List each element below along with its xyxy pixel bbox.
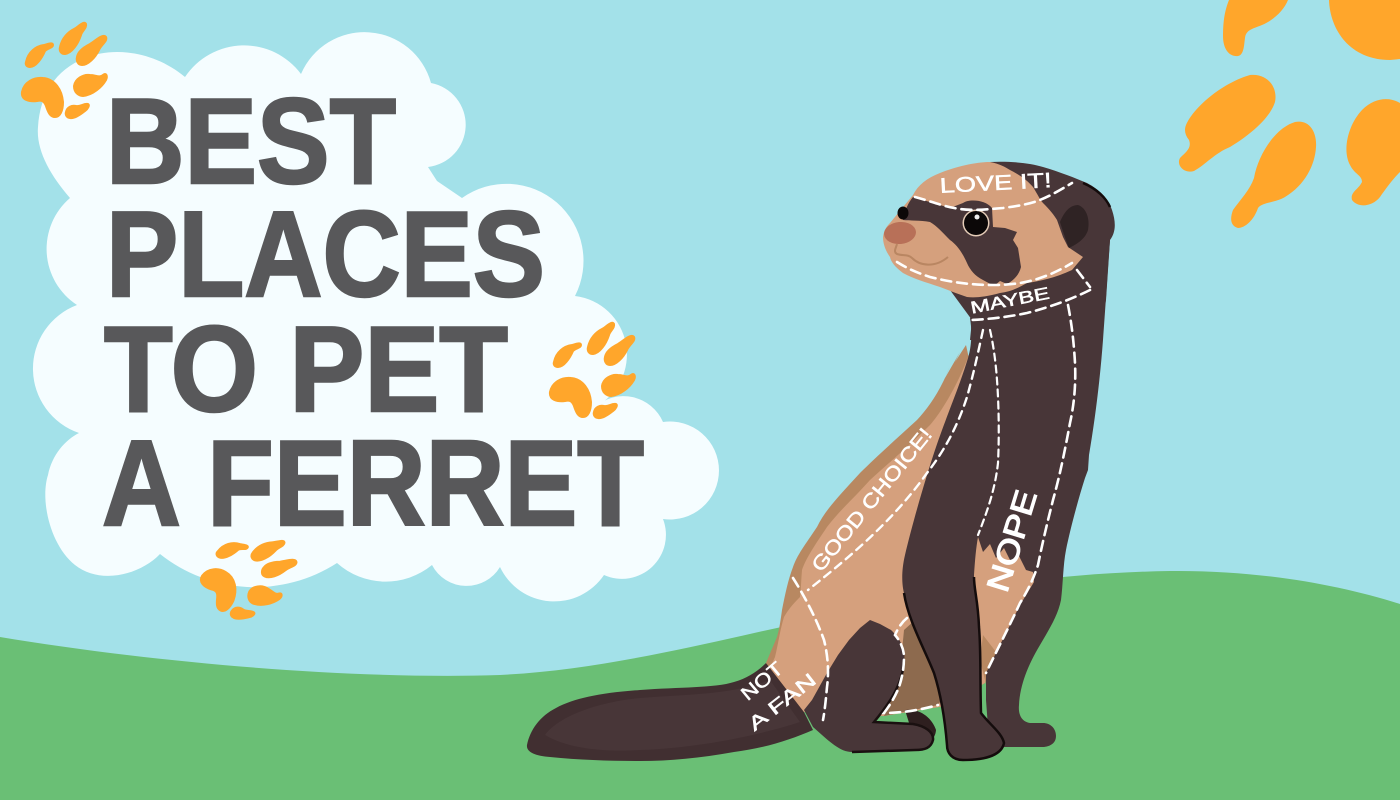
ear: [1060, 205, 1089, 248]
nose: [883, 221, 917, 245]
label: not a fan: A FAN: [745, 670, 821, 736]
eye: [962, 210, 990, 236]
tan patch between the legs: [974, 530, 1036, 684]
neck, torso, front leg and right hind leg: [902, 230, 1110, 760]
title: [102, 73, 644, 551]
ferret flank, light tan: [770, 352, 1000, 716]
near haunch and hind foot: [804, 620, 933, 752]
face, tan: [883, 162, 1083, 297]
large paw print, top right: [1179, 0, 1400, 228]
ferret tail: [527, 663, 813, 761]
dashed petting zone outlines: [793, 183, 1090, 720]
paw print, cloud right: [550, 323, 635, 418]
eye mask: [903, 197, 1021, 286]
ferret illustration: [527, 162, 1115, 761]
front leg outline: [904, 577, 1004, 760]
mouth: [895, 244, 948, 265]
far hind foot: [905, 710, 936, 743]
label: nope: NOPE: [980, 486, 1044, 596]
paw print, cloud top left: [22, 23, 107, 118]
green hill: [0, 571, 1400, 800]
shadow in the tan patch: [980, 635, 996, 684]
belly shadow: [884, 620, 945, 716]
label: good choice: GOOD CHOICE!: [808, 424, 937, 576]
cloud panel behind title: [33, 32, 719, 601]
title: TO PET: [104, 301, 508, 437]
label: not a fan: [737, 658, 821, 736]
title: A FERRET: [102, 415, 644, 551]
paw print, cloud bottom: [192, 516, 303, 632]
title: BEST: [106, 73, 396, 209]
title: PLACES: [106, 186, 545, 322]
head outline highlight: [1083, 183, 1110, 207]
label: love it: LOVE IT!: [939, 169, 1052, 198]
ferret back and flank, dark tan: [766, 345, 1000, 716]
tail lighter centre: [545, 680, 800, 751]
back of head and neck: [950, 162, 1115, 340]
nose tip: [898, 206, 908, 220]
label: not a fan: NOT: [737, 658, 788, 705]
label: maybe: MAYBE: [969, 284, 1051, 318]
